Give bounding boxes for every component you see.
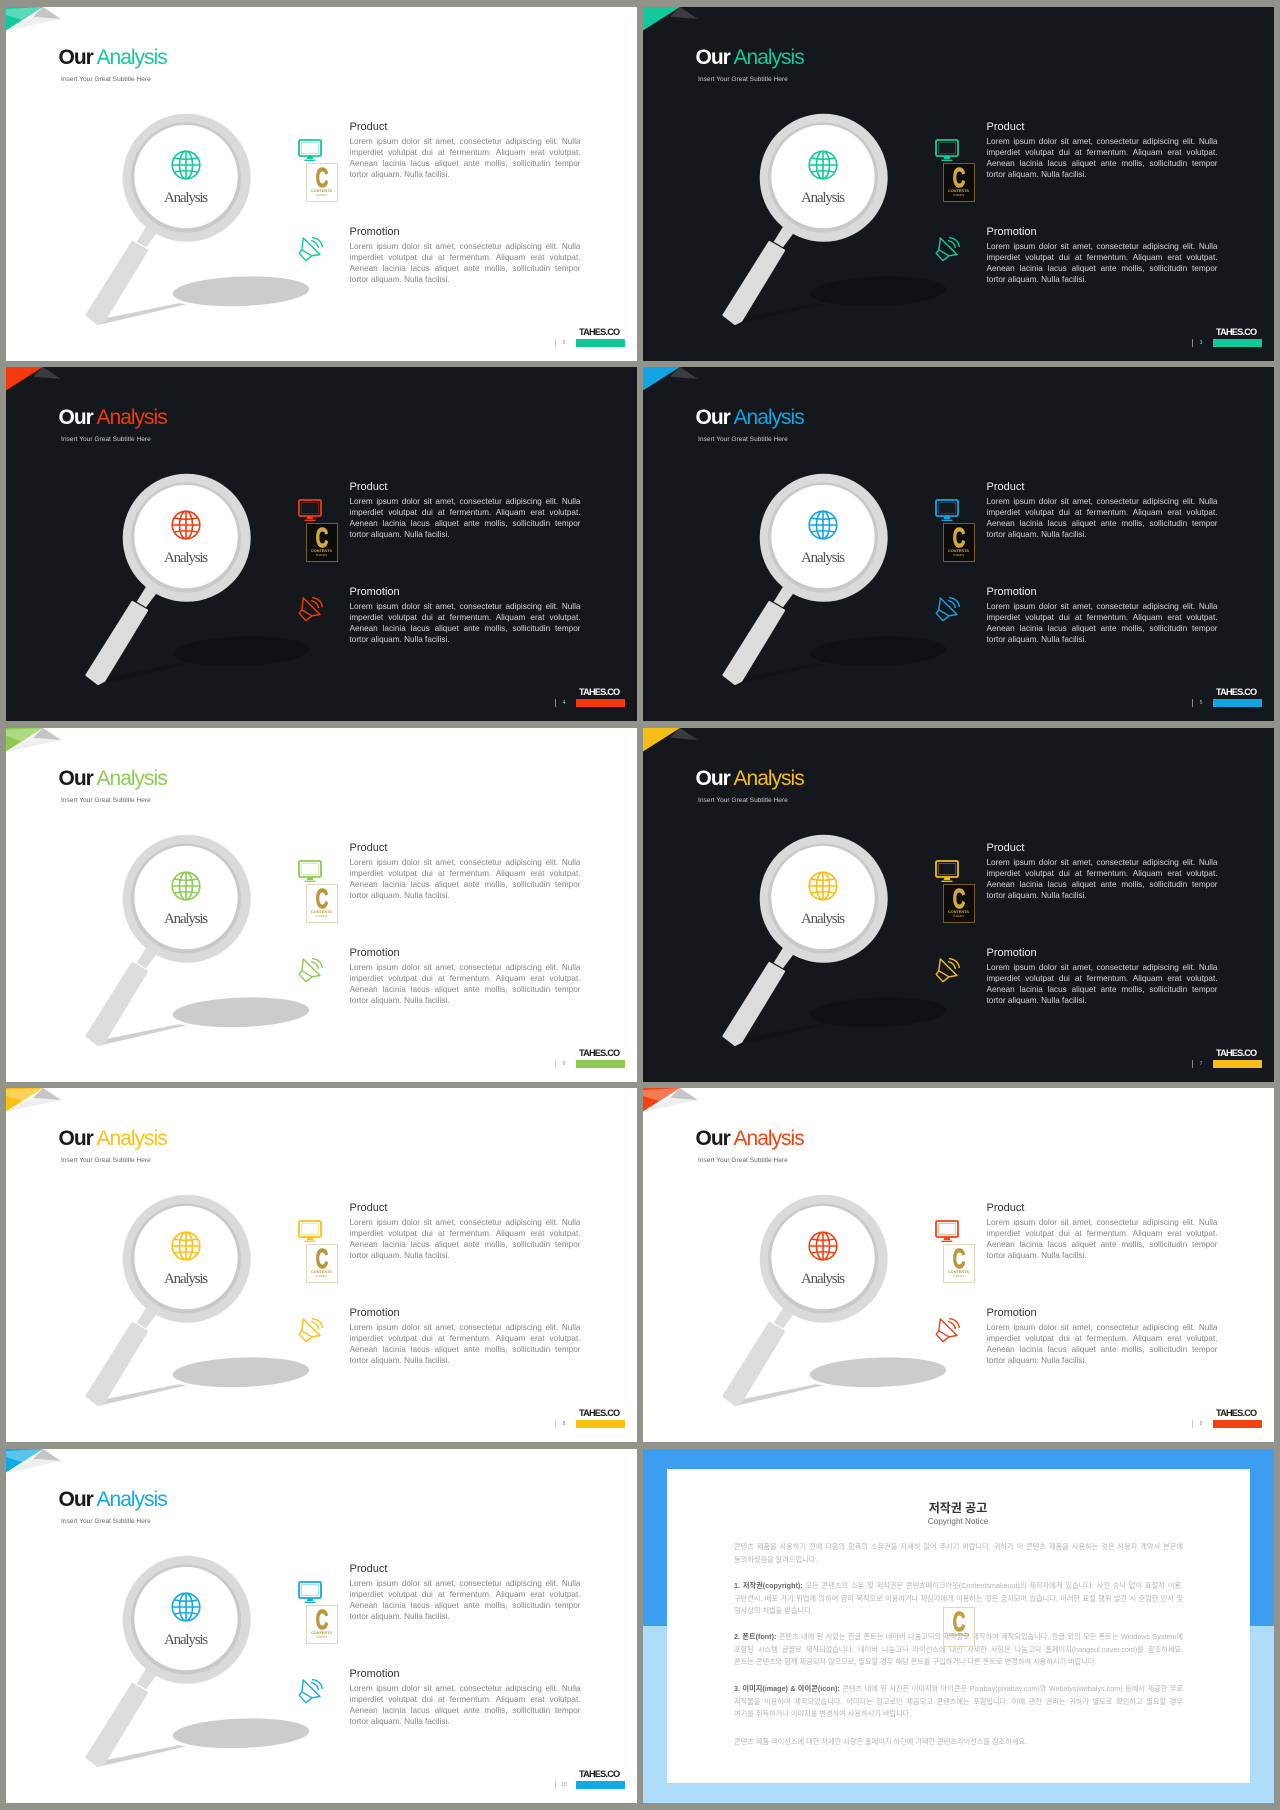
- page number: 2: [563, 340, 565, 346]
- title: Our Analysis: [58, 46, 167, 69]
- watermark badge: CONTENTS: [949, 1633, 969, 1637]
- icon: globe: [171, 150, 201, 180]
- icon: globe: [171, 1592, 201, 1622]
- page number: 7: [1200, 1061, 1202, 1067]
- text: promotion: [350, 1682, 580, 1727]
- text: promotion: tortor aliquam. Nulla facilisi.: [986, 635, 1087, 644]
- text: product: Lorem ipsum dolor sit amet, consectetur adipiscing elit. Nulla: [986, 137, 1218, 146]
- text: promotion: tortor aliquam. Nulla facilisi.: [986, 275, 1087, 284]
- text: promotion: Lorem ipsum dolor sit amet, consectetur adipiscing elit. Nulla: [350, 602, 580, 610]
- icon: speaker: [935, 958, 960, 983]
- subtitle: Insert Your Great Subtitle Here: [61, 1157, 151, 1164]
- text: product: imperdiet volutpat dui at fermentum. Aliquam erat volutpat.: [350, 1229, 580, 1238]
- icon: speaker: [298, 237, 323, 262]
- text: product: imperdiet volutpat dui at fermentum. Aliquam erat volutpat.: [986, 508, 1218, 517]
- text: promotion: Aenean lacinia lacus aliquet ante mollis, sollicitudin tempor: [350, 1345, 580, 1354]
- corner accent: [6, 367, 61, 390]
- text: product: tortor aliquam. Nulla facilisi.: [986, 170, 1087, 179]
- watermark badge: CONTENTS: [311, 910, 332, 914]
- text: product: Lorem ipsum dolor sit amet, consectetur adipiscing elit. Nulla: [986, 1218, 1218, 1227]
- magnifying glass with shadow: [85, 474, 251, 685]
- magnifying glass with shadow: [713, 828, 953, 1058]
- title: Our Analysis: [58, 406, 167, 429]
- text: product: [350, 1578, 580, 1623]
- accent bar: [576, 1780, 625, 1789]
- watermark badge: [306, 1605, 338, 1644]
- corner accent: [643, 367, 698, 390]
- magnifying glass with shadow: [722, 474, 888, 685]
- text: product: imperdiet volutpat dui at fermentum. Aliquam erat volutpat.: [350, 148, 580, 157]
- watermark badge: CONTENTS: [948, 910, 969, 914]
- watermark badge: THANKS: [953, 914, 964, 918]
- accent bar: [576, 338, 625, 347]
- magnifying glass with shadow: [86, 114, 310, 325]
- magnifying glass with shadow: [713, 1188, 953, 1418]
- panel: slide 9 red on white: [643, 1088, 1274, 1442]
- notice clause 2: 2. 폰트(font): 콘텐츠 내에 된 서있는 한글 폰트는 네이버 나눔고딕의 제작물로 제작하여 제작되었습니다. 한글 외의 모든 폰트는 Windows System에: [734, 1632, 1183, 1641]
- panel: slide 8 yellow on white: [6, 1088, 637, 1442]
- brand: TAHES.CO: [579, 686, 619, 696]
- text: product: [350, 858, 580, 900]
- heading: promotion: Promotion: [986, 946, 1037, 958]
- text: product: Aenean lacinia lacus aliquet ante mollis, sollicitudin tempor: [986, 1240, 1218, 1249]
- page number: 3: [1200, 340, 1202, 346]
- page number: 5: [1200, 700, 1202, 706]
- heading: product: Product: [350, 842, 387, 854]
- watermark badge: CONTENTS: [311, 1631, 332, 1635]
- notice clause 3: 3. 이미지(image) & 아이콘(icon): 콘텐츠 내에 된 사진은 이미지와 아이콘은 Pixabay(pixabay.com)와 Webalys(webalys.com) 등에서 제공한 무료: [734, 1684, 1183, 1693]
- corner accent: [643, 728, 703, 758]
- heading: promotion: Promotion: [986, 586, 1037, 598]
- watermark badge: [306, 523, 338, 562]
- text: product: Aenean lacinia lacus aliquet ante mollis, sollicitudin tempor: [350, 1240, 580, 1249]
- magnifying glass with shadow: [76, 1549, 316, 1779]
- lens label: Analysis: [164, 550, 207, 566]
- notice heading: 저작권 공고: [929, 1501, 987, 1515]
- text: promotion: imperdiet volutpat dui at fermentum. Aliquam erat volutpat.: [350, 613, 580, 622]
- notice clause 2: 폰트는 콘텐츠와 함께 제공되지 않으므로, 필요할 경우 해당 폰트를 구입하거나 다른 폰트로 변경하여 사용하시기 바랍니다.: [734, 1657, 1097, 1666]
- accent bar: [1213, 338, 1262, 347]
- text: product: [350, 497, 580, 539]
- watermark badge: THANKS: [316, 1635, 327, 1639]
- title: Our Analysis: [696, 1127, 804, 1150]
- text: promotion: [350, 962, 580, 1005]
- watermark badge: CONTENTS: [948, 189, 969, 193]
- notice clause 1: 구만전시, 배포 가기 위법에 의하여 영리 목적으로 이용하거나 제삼자에게 이용하는 것은 금지되어 있습니다. 이러한 표절 행위 발견 시 준엄한 민사 및: [734, 1594, 1183, 1602]
- panel: slide 2 teal on white: [6, 7, 637, 361]
- accent bar: [1213, 1420, 1262, 1428]
- text: promotion: tortor aliquam. Nulla facilisi.: [986, 996, 1087, 1005]
- notice clause 2: 포함된 시스템 글꼴로 제작되었습니다. 네이버 나눔고딕 라이선스에 대한 자세한 사항은 나눔고딕 홈페이지(hangeul.naver.com)를 참조하세요.: [734, 1644, 1183, 1654]
- text: product: Lorem ipsum dolor sit amet, consectetur adipiscing elit. Nulla: [350, 858, 580, 867]
- icon: monitor: [298, 860, 322, 882]
- text: product: Aenean lacinia lacus aliquet ante mollis, sollicitudin tempor: [350, 880, 580, 889]
- watermark badge: CONTENTS: [311, 189, 332, 193]
- watermark badge: THANKS: [953, 553, 964, 557]
- heading: product: Product: [986, 1202, 1024, 1214]
- text: product: tortor aliquam. Nulla facilisi.: [986, 1251, 1087, 1260]
- lens label: Analysis: [164, 911, 207, 927]
- notice intro: [734, 1541, 1183, 1566]
- lens label: Analysis: [801, 190, 844, 206]
- icon: monitor: [298, 139, 322, 161]
- corner accent: [6, 728, 61, 752]
- watermark badge: [943, 1607, 975, 1647]
- text: promotion: [986, 962, 1218, 1006]
- magnifying glass with shadow: [76, 1188, 316, 1418]
- text: promotion: Lorem ipsum dolor sit amet, consectetur adipiscing elit. Nulla: [986, 242, 1218, 250]
- page number: 4: [563, 700, 565, 706]
- panel: slide 7 yellow on dark: [643, 728, 1274, 1082]
- text: promotion: [350, 1322, 580, 1366]
- watermark badge: THANKS: [316, 553, 327, 557]
- lens label: Analysis: [801, 911, 844, 927]
- panel: slide 6 green on white: [6, 728, 637, 1082]
- subtitle: Insert Your Great Subtitle Here: [698, 436, 788, 443]
- watermark badge: [306, 163, 338, 202]
- text: promotion: Lorem ipsum dolor sit amet, consectetur adipiscing elit. Nulla: [350, 962, 580, 972]
- watermark badge: THANKS: [316, 1274, 327, 1278]
- text: product: tortor aliquam. Nulla facilisi.: [986, 530, 1087, 539]
- notice intro: 동의하셨음을 알려드립니다.: [734, 1554, 817, 1564]
- text: product: tortor aliquam. Nulla facilisi.: [350, 1251, 450, 1260]
- text: promotion: imperdiet volutpat dui at fermentum. Aliquam erat volutpat.: [986, 613, 1218, 622]
- subtitle: Insert Your Great Subtitle Here: [61, 1518, 151, 1525]
- text: product: tortor aliquam. Nulla facilisi.: [350, 170, 450, 179]
- corner accent: [6, 1088, 66, 1118]
- brand: TAHES.CO: [1216, 686, 1256, 696]
- magnifying glass with shadow: [722, 114, 888, 325]
- notice clause 3: 저작물을 이용하여 제작되었습니다. 이미지는 참고로만 제공되고 콘텐츠에는 포함됩니다. 이에 관한 권리는 귀하가 별도로 확인하고 필요할 경우: [734, 1696, 1183, 1706]
- text: promotion: Aenean lacinia lacus aliquet ante mollis, sollicitudin tempor: [986, 985, 1218, 994]
- text: product: imperdiet volutpat dui at fermentum. Aliquam erat volutpat.: [350, 508, 580, 517]
- watermark badge: THANKS: [953, 1274, 964, 1278]
- text: promotion: Lorem ipsum dolor sit amet, consectetur adipiscing elit. Nulla: [986, 602, 1218, 610]
- icon: globe: [171, 510, 201, 540]
- corner accent: [6, 1449, 66, 1479]
- icon: speaker: [298, 1679, 323, 1704]
- corner accent: [643, 1088, 703, 1118]
- notice clause 3: 여기를 취득하거나 이미지를 변경하여 사용하시기 바랍니다.: [734, 1709, 911, 1718]
- title: Our Analysis: [696, 46, 804, 69]
- magnifying glass with shadow: [86, 834, 310, 1046]
- notice clause 3: [734, 1683, 1183, 1721]
- subtitle: Insert Your Great Subtitle Here: [61, 797, 151, 804]
- text: promotion: tortor aliquam. Nulla facilisi.: [350, 1717, 450, 1726]
- heading: product: Product: [350, 1202, 387, 1214]
- title: Our Analysis: [696, 406, 804, 429]
- brand: TAHES.CO: [579, 1408, 619, 1418]
- subtitle: Insert Your Great Subtitle Here: [698, 1157, 788, 1164]
- text: product: Aenean lacinia lacus aliquet ante mollis, sollicitudin tempor: [986, 519, 1218, 528]
- text: promotion: imperdiet volutpat dui at fermentum. Aliquam erat volutpat.: [350, 253, 580, 262]
- text: promotion: imperdiet volutpat dui at fermentum. Aliquam erat volutpat.: [986, 1334, 1218, 1343]
- accent bar: [576, 1060, 625, 1068]
- text: product: imperdiet volutpat dui at fermentum. Aliquam erat volutpat.: [350, 1590, 580, 1599]
- text: promotion: Aenean lacinia lacus aliquet ante mollis, sollicitudin tempor: [350, 1706, 580, 1715]
- text: promotion: imperdiet volutpat dui at fermentum. Aliquam erat volutpat.: [350, 974, 580, 983]
- text: promotion: Lorem ipsum dolor sit amet, consectetur adipiscing elit. Nulla: [350, 1684, 580, 1692]
- watermark badge: CONTENTS: [311, 1270, 332, 1274]
- brand: TAHES.CO: [1216, 326, 1256, 336]
- heading: product: Product: [350, 480, 387, 492]
- heading: product: Product: [986, 120, 1024, 132]
- text: product: tortor aliquam. Nulla facilisi.: [350, 1612, 450, 1621]
- text: product: Lorem ipsum dolor sit amet, consectetur adipiscing elit. Nulla: [350, 1579, 580, 1588]
- text: promotion: Aenean lacinia lacus aliquet ante mollis, sollicitudin tempor: [350, 985, 580, 994]
- heading: promotion: Promotion: [350, 1306, 400, 1318]
- text: product: tortor aliquam. Nulla facilisi.: [350, 530, 450, 539]
- icon: monitor: [935, 139, 959, 161]
- heading: promotion: Promotion: [986, 226, 1037, 238]
- text: product: imperdiet volutpat dui at fermentum. Aliquam erat volutpat.: [986, 148, 1218, 157]
- text: promotion: tortor aliquam. Nulla facilisi.: [350, 996, 450, 1005]
- brand: TAHES.CO: [579, 326, 619, 336]
- brand: TAHES.CO: [579, 1768, 619, 1778]
- subtitle: Insert Your Great Subtitle Here: [698, 76, 788, 83]
- icon: globe: [808, 510, 838, 540]
- icon: globe: [808, 1231, 838, 1261]
- text: promotion: [986, 242, 1218, 284]
- icon: speaker: [298, 958, 323, 982]
- icon: monitor: [934, 860, 958, 882]
- icon: speaker: [298, 597, 323, 622]
- watermark badge: CONTENTS: [311, 549, 332, 553]
- panel: slide 4 red on dark: [6, 367, 637, 721]
- text: product: [350, 1217, 580, 1262]
- text: product: [986, 497, 1218, 539]
- title: Our Analysis: [58, 767, 167, 790]
- watermark badge: CONTENTS: [948, 549, 969, 553]
- watermark badge: [942, 523, 974, 562]
- text: product: imperdiet volutpat dui at fermentum. Aliquam erat volutpat.: [986, 869, 1218, 878]
- icon: monitor: [935, 499, 959, 521]
- text: promotion: [986, 1322, 1218, 1366]
- heading: product: Product: [350, 1562, 387, 1574]
- text: product: Lorem ipsum dolor sit amet, consectetur adipiscing elit. Nulla: [986, 858, 1218, 867]
- text: promotion: tortor aliquam. Nulla facilisi.: [986, 1356, 1087, 1365]
- heading: promotion: Promotion: [350, 586, 400, 598]
- text: product: [986, 857, 1218, 902]
- text: promotion: Lorem ipsum dolor sit amet, consectetur adipiscing elit. Nulla: [350, 1322, 580, 1332]
- text: promotion: Lorem ipsum dolor sit amet, consectetur adipiscing elit. Nulla: [986, 1322, 1218, 1332]
- heading: product: Product: [986, 842, 1024, 854]
- text: product: Aenean lacinia lacus aliquet ante mollis, sollicitudin tempor: [350, 1601, 580, 1610]
- title: Our Analysis: [696, 767, 804, 790]
- title: Our Analysis: [58, 1127, 167, 1150]
- accent bar: [1213, 1060, 1262, 1068]
- page number: 8: [563, 1421, 565, 1427]
- corner accent: [643, 7, 698, 30]
- text: product: Lorem ipsum dolor sit amet, consectetur adipiscing elit. Nulla: [350, 137, 580, 146]
- heading: promotion: Promotion: [350, 1668, 400, 1680]
- brand: TAHES.CO: [579, 1048, 619, 1058]
- watermark badge: [942, 163, 974, 202]
- brand: TAHES.CO: [1216, 1048, 1256, 1058]
- watermark badge: [306, 884, 338, 923]
- notice intro: 콘텐츠 제품을 사용하기 전에 다음의 항목의 소유권을 자세히 읽어 주시기 바랍니다. 귀하가 이 콘텐츠 제품을 사용하는 것은 사용자 계약서 본문에: [734, 1542, 1183, 1551]
- page number: 10: [561, 1782, 567, 1788]
- accent bar: [576, 698, 625, 707]
- text: promotion: Aenean lacinia lacus aliquet ante mollis, sollicitudin tempor: [986, 624, 1218, 633]
- text: product: [986, 137, 1218, 179]
- icon: globe: [808, 150, 838, 180]
- text: promotion: [350, 602, 580, 644]
- text: promotion: tortor aliquam. Nulla facilisi.: [350, 1356, 450, 1365]
- watermark badge: CONTENTS: [948, 1270, 969, 1274]
- text: promotion: Aenean lacinia lacus aliquet ante mollis, sollicitudin tempor: [350, 264, 580, 273]
- watermark badge: THANKS: [316, 193, 327, 197]
- text: product: Aenean lacinia lacus aliquet ante mollis, sollicitudin tempor: [350, 159, 580, 168]
- subtitle: Insert Your Great Subtitle Here: [61, 436, 151, 443]
- text: product: Aenean lacinia lacus aliquet ante mollis, sollicitudin tempor: [986, 159, 1218, 168]
- text: promotion: imperdiet volutpat dui at fermentum. Aliquam erat volutpat.: [350, 1695, 580, 1704]
- lens label: Analysis: [801, 1271, 844, 1287]
- panel: slide 10 blue on white: [6, 1449, 637, 1803]
- heading: promotion: Promotion: [350, 226, 400, 238]
- text: promotion: Lorem ipsum dolor sit amet, consectetur adipiscing elit. Nulla: [986, 962, 1218, 972]
- icon: monitor: [298, 1220, 322, 1242]
- page number: 9: [1200, 1421, 1202, 1427]
- icon: globe: [171, 1231, 201, 1261]
- text: product: imperdiet volutpat dui at fermentum. Aliquam erat volutpat.: [986, 1229, 1218, 1238]
- lens label: Analysis: [164, 190, 207, 206]
- text: promotion: tortor aliquam. Nulla facilisi.: [350, 275, 450, 284]
- watermark badge: THANKS: [953, 193, 964, 197]
- text: product: Aenean lacinia lacus aliquet ante mollis, sollicitudin tempor: [350, 519, 580, 528]
- text: product: [350, 137, 580, 179]
- corner accent: [6, 7, 61, 30]
- text: product: imperdiet volutpat dui at fermentum. Aliquam erat volutpat.: [350, 869, 580, 878]
- icon: monitor: [298, 499, 322, 521]
- accent bar: [576, 1420, 625, 1428]
- text: promotion: Aenean lacinia lacus aliquet ante mollis, sollicitudin tempor: [986, 1345, 1218, 1354]
- notice subtitle: Copyright Notice: [928, 1517, 988, 1526]
- text: promotion: Aenean lacinia lacus aliquet ante mollis, sollicitudin tempor: [986, 264, 1218, 273]
- accent bar: [1213, 698, 1262, 707]
- page number: 6: [563, 1061, 565, 1067]
- watermark badge: THANKS: [316, 914, 327, 918]
- icon: speaker: [936, 597, 960, 622]
- text: product: tortor aliquam. Nulla facilisi.: [350, 891, 450, 900]
- text: product: tortor aliquam. Nulla facilisi.: [986, 891, 1087, 900]
- subtitle: Insert Your Great Subtitle Here: [61, 76, 151, 83]
- text: product: [986, 1217, 1218, 1262]
- icon: globe: [171, 871, 201, 901]
- text: promotion: Aenean lacinia lacus aliquet ante mollis, sollicitudin tempor: [350, 624, 580, 633]
- notice card: [667, 1469, 1250, 1783]
- text: promotion: tortor aliquam. Nulla facilisi.: [350, 635, 450, 644]
- text: promotion: Lorem ipsum dolor sit amet, consectetur adipiscing elit. Nulla: [350, 242, 580, 250]
- icon: monitor: [298, 1580, 322, 1603]
- lens label: Analysis: [801, 550, 844, 566]
- icon: speaker: [936, 237, 960, 262]
- heading: product: Product: [350, 120, 387, 132]
- notice clause 1: 1. 저작권(copyright): 모든 콘텐츠의 소유 및 저작권은 콘텐츠메이크아웃(Contentsmakeout)의 제작자에게 있습니다. 사전 승낙 없이 표절적 이용,: [734, 1581, 1183, 1590]
- icon: monitor: [934, 1220, 958, 1242]
- icon: speaker: [935, 1318, 960, 1343]
- text: promotion: imperdiet volutpat dui at fermentum. Aliquam erat volutpat.: [986, 974, 1218, 983]
- icon: speaker: [298, 1318, 323, 1343]
- text: promotion: [350, 242, 580, 284]
- watermark badge: [942, 1244, 974, 1283]
- brand: TAHES.CO: [1216, 1408, 1256, 1418]
- title: Our Analysis: [58, 1488, 167, 1511]
- panel: slide 3 teal on dark: [643, 7, 1274, 361]
- lens label: Analysis: [164, 1271, 207, 1287]
- text: product: Lorem ipsum dolor sit amet, consectetur adipiscing elit. Nulla: [986, 497, 1218, 506]
- text: product: Lorem ipsum dolor sit amet, consectetur adipiscing elit. Nulla: [350, 1218, 580, 1227]
- lens label: Analysis: [164, 1632, 207, 1648]
- subtitle: Insert Your Great Subtitle Here: [698, 797, 788, 804]
- icon: globe: [808, 871, 838, 901]
- heading: promotion: Promotion: [350, 946, 400, 958]
- text: promotion: imperdiet volutpat dui at fermentum. Aliquam erat volutpat.: [350, 1334, 580, 1343]
- heading: product: Product: [986, 480, 1024, 492]
- text: promotion: imperdiet volutpat dui at fermentum. Aliquam erat volutpat.: [986, 253, 1218, 262]
- panel: slide 5 blue on dark: [643, 367, 1274, 721]
- notice clause 1: 형사상의 처벌을 받습니다.: [734, 1606, 813, 1615]
- notice clause 2: [734, 1631, 1183, 1669]
- text: product: Aenean lacinia lacus aliquet ante mollis, sollicitudin tempor: [986, 880, 1218, 889]
- panel: copyright notice slide: [643, 1449, 1274, 1803]
- notice clause 1: [734, 1580, 1183, 1618]
- heading: promotion: Promotion: [986, 1306, 1037, 1318]
- text: product: Lorem ipsum dolor sit amet, consectetur adipiscing elit. Nulla: [350, 497, 580, 506]
- text: promotion: [986, 602, 1218, 644]
- watermark badge: [942, 884, 974, 923]
- notice footer line: 콘텐츠 제품 라이선스에 대한 자세한 사항은 홈페이지 하단에 기재한 콘텐츠라이선스를 참조하세요.: [734, 1737, 1027, 1746]
- watermark badge: [306, 1244, 338, 1283]
